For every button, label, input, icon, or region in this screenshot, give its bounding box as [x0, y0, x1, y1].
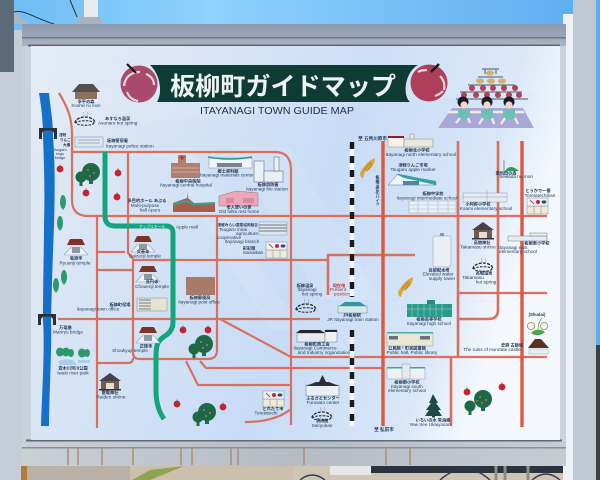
place: town office [77, 298, 167, 312]
place: Koami elementary school: Koami elementary school [460, 206, 512, 211]
right sky strip [595, 0, 600, 345]
place: east elementary school: 板柳東小学校 [524, 240, 550, 246]
place: Takamasu shrine: Takamasu shrine [460, 244, 496, 250]
place: old folks rest home: 老人憩いの家 [226, 204, 252, 210]
place: Chouenji temple: Chouenji temple [135, 284, 169, 289]
place: town office: 板柳町役場 [110, 301, 131, 308]
place: Chouenji temple: 長円寺 [146, 278, 158, 285]
place: central hospital: Itayanagi central hospital [160, 182, 212, 188]
label: Goshogawara direction: 至 五所川原市 [358, 135, 387, 142]
place: commerce and industry organization: Itayanagi Commerce [293, 346, 337, 350]
place: Takamasu shrine [460, 222, 496, 250]
place: Takamasu shrine: 高増神社 [474, 239, 491, 246]
illustration: children carrying apple pyramid [438, 69, 534, 128]
title banner [150, 65, 418, 102]
apples and trees: north-west field [57, 163, 121, 200]
wooden post base [21, 466, 27, 480]
place: Shoukyuji temple: Shoukyuji temple [112, 348, 148, 353]
place: ruins of Hurutate castle: The ruins of Hurutate castle [463, 347, 521, 352]
place: agricultural cooperative: cooperative [217, 235, 242, 240]
place: multi-purpose hall Apuru: Multi-purpose [131, 203, 160, 208]
place: Raiden shrine: Raiden shrine [97, 394, 126, 400]
place: Tsugaru ringo bridge: ringo [56, 152, 64, 156]
place: fire station [246, 157, 288, 192]
place: agricultural cooperative: 津軽みらい農業協同組合 [217, 222, 258, 227]
place: Iwaki river park [56, 348, 90, 376]
apples and trees: central field [180, 326, 213, 358]
place: north elementary school: 板柳北小学校 [404, 146, 430, 154]
icon: corn, south [398, 277, 413, 297]
place: high school: 板柳高等学校 [416, 316, 442, 322]
place: apple market: Tsugaru apple market [390, 167, 436, 172]
place: Seiryukan [312, 407, 333, 428]
place: Ryuenji temple: 竜淵寺 [70, 254, 82, 262]
place: agricultural cooperative: Itayanagi branch [225, 239, 260, 244]
place: Ryuenji temple: Ryuenji temple [59, 260, 91, 266]
place: Raiden shrine: 雷電神社 [102, 389, 119, 396]
place: Tonda bo ichiban shop: とうかで一番 [525, 187, 551, 194]
place: Koami elementary school [460, 190, 512, 211]
place: Manryu bridge: Manryu bridge [53, 330, 83, 334]
place: south elementary school: 板柳南小学校 [394, 378, 420, 386]
place: Sewada no mori [496, 160, 533, 179]
place: Daizenji temple: Daizenji temple [129, 254, 161, 258]
place: commerce and industry organization: and Industry organization [298, 350, 351, 355]
sky background [0, 0, 600, 30]
place: Toretatechi: とれたて市 [263, 405, 284, 412]
place: Asunaro hot spring: あすなろ温泉 [105, 115, 131, 122]
place: fire station: 板柳消防署 [258, 181, 278, 188]
place: Daizenji temple [129, 236, 161, 258]
icon: right apple [410, 64, 448, 102]
place: Saisaikan [243, 242, 287, 258]
left dark utility box [0, 0, 14, 72]
place: east elementary school: Itayanagi east [498, 245, 528, 250]
place: Itayanagi hot spring: hot spring [302, 292, 323, 296]
label: present position: position [334, 292, 350, 296]
place: central hospital: 板柳中央病院 [175, 178, 201, 184]
bottom frame beam [22, 440, 566, 466]
place: Furusato center: Furusato center [307, 400, 340, 405]
place: multi-purpose hall Apuru: hall Apuru [140, 208, 161, 212]
place: Ryuenji temple [59, 239, 91, 266]
ground: pavement behind the sign [0, 460, 600, 480]
place: intermediate school: 板柳中学校 [423, 190, 444, 197]
place: multi-purpose hall Apuru: 多目的ホール あぷる [128, 197, 166, 204]
right background building edge [595, 345, 600, 480]
sign left post [0, 72, 22, 480]
bicycles behind the sign [300, 466, 560, 480]
place: Shoukyuji temple [112, 327, 160, 353]
place: Raiden shrine [97, 373, 126, 400]
place: north elementary school: Itayanagi north elementary school [386, 152, 456, 157]
place: multi-purpose hall Apuru [128, 192, 215, 212]
place: central hospital [160, 155, 212, 188]
place: apple market [388, 162, 436, 185]
place: town office: Itayanagi town office [77, 306, 120, 312]
place: Seiryukan: 清流館 [316, 417, 328, 424]
place: public hall and library [387, 332, 438, 355]
icon: forest house [72, 84, 100, 99]
green road: apple mall [105, 152, 173, 419]
place: police station: 板柳警察署 [107, 137, 128, 144]
place: high school: Itayanagi high school [407, 321, 451, 326]
apples and trees: south-central field [174, 400, 226, 426]
place: Kouhei no mori [72, 84, 100, 108]
place: Tonda bo ichiban shop: Toretatechiban [525, 193, 556, 198]
place: Itayanagi hot spring: Itayanagi [297, 287, 317, 292]
place: Furusato center: ふるさとセンター [306, 394, 340, 402]
place: JR train station: JR板柳駅 [343, 312, 362, 318]
place: old folks rest home: Old folks rest home [219, 209, 260, 214]
place: Asunaro hot spring [75, 112, 138, 126]
place: apple market: 津軽りんご市場 [398, 162, 428, 168]
place: post office [178, 277, 220, 304]
road network [58, 93, 547, 428]
place: agricultural cooperative: Tsugaru mirai [219, 227, 247, 232]
window reflections on the board [31, 46, 560, 330]
place: Tsugaru ringo bridge: 大橋 [63, 142, 71, 147]
label: apple mall on road: アップルモール [139, 224, 165, 229]
place: Toretatechi [255, 391, 284, 416]
place: Chouenji temple [135, 266, 169, 289]
place: materials center [200, 157, 254, 178]
river [39, 93, 55, 426]
place: east elementary school [498, 233, 550, 254]
place: ruins of Hurutate castle [463, 312, 549, 354]
sign right post [563, 0, 596, 480]
place: Asunaro hot spring: Asunaro hot spring [98, 120, 138, 126]
place: agricultural cooperative [217, 222, 287, 244]
place: police station: Itayanagi police station [106, 144, 154, 148]
place: Iwaki river park: 岩木川河川公園 [58, 364, 88, 372]
place: fire station: Itayanagi fire station [246, 186, 288, 192]
place: Kouhei no mori: 幸平の森 [78, 98, 95, 105]
place: agricultural cooperative: agriculture [236, 231, 258, 236]
place: yew tree: いちいの木 常海橋 [416, 416, 451, 424]
place: north elementary school [386, 134, 456, 157]
apples and trees: south-east field [464, 382, 505, 415]
subtitle: ITAYANAGI TOWN GUIDE MAP [200, 106, 354, 117]
left sign shoulder [14, 8, 28, 24]
place: police station [75, 137, 154, 148]
place: Daizenji temple: 大善寺 [137, 248, 149, 255]
place: materials center: Itayanagi materials center [200, 172, 254, 178]
place: commerce and industry organization [293, 330, 351, 355]
place: public hall and library: 公民館・町民図書館 [388, 344, 426, 352]
place: Iwaki river park: Iwaki river park [57, 370, 89, 376]
place: south elementary school: Itayanagi south [391, 384, 423, 389]
title text: 板柳町ガイドマップ [170, 73, 396, 101]
label: present position [330, 282, 350, 296]
railway line [350, 142, 354, 426]
place: old folks rest home [219, 191, 260, 214]
place: yew tree [409, 394, 451, 427]
place: south elementary school [387, 364, 426, 393]
place: Takamasu hot spring: Takamasu [462, 275, 484, 280]
place: Takamasu hot spring: hot spring [476, 280, 497, 284]
place: Tsugaru ringo bridge: bridge [55, 156, 65, 160]
place: elevated water supply tower: 高架配水塔 [429, 266, 450, 274]
place: south elementary school: elementary school [388, 388, 426, 393]
label: present position: Present [330, 287, 347, 292]
place: JR train station: JR Itayanagi train station [327, 317, 379, 322]
place: Manryu bridge: 万竜橋 [59, 324, 72, 331]
place: Saisaikan: 彩彩館 [243, 244, 255, 252]
place: elevated water supply tower [422, 233, 456, 281]
label: present position: 現在地 [333, 282, 346, 289]
map board panel [31, 46, 560, 440]
place: elevated water supply tower: Elevated water [422, 272, 454, 276]
place: public hall and library: Public hall, Public library [387, 350, 438, 355]
riverside bushes [53, 195, 67, 293]
place: Tonda bo ichiban shop [525, 187, 556, 214]
place: Toretatechi: Toretatechi [255, 410, 277, 416]
label: Apple mall: Apple mall [176, 224, 198, 230]
place: ruins of Hurutate castle: (Shudai) [529, 312, 546, 317]
place: intermediate school: Itayanagi intermediate school [397, 196, 457, 200]
place: Manryu bridge [38, 314, 83, 334]
place: Koami elementary school: 小阿弥小学校 [465, 200, 491, 208]
place: Takamasu hot spring [462, 258, 497, 284]
place: Tsugaru ringo bridge: Tsugaru [53, 148, 67, 152]
icon: left apple [120, 64, 158, 102]
place: Saisaikan: Saisaikan [243, 250, 264, 255]
place: Kouhei no mori: Kouhei no mori [72, 103, 100, 108]
place: Seiryukan: Seiryukan [312, 423, 333, 428]
vertical label: activity heights: 板柳活性化ハイツ [375, 174, 380, 207]
place: yew tree: Yew tree Ukaiyosan [409, 422, 451, 427]
place: intermediate school [397, 190, 457, 213]
place: east elementary school: elementary school [499, 249, 537, 254]
place: Itayanagi hot spring [296, 282, 323, 312]
antenna pole on the roof [14, 0, 101, 25]
place: ruins of Hurutate castle: 史跡 古館城 [501, 342, 524, 348]
top frame beam [22, 24, 566, 46]
place: Sewada no mori: 瀬和田の森 [496, 170, 517, 176]
icon: corn, north [360, 158, 375, 178]
place: commerce and industry organization: 板柳町商工会 [304, 340, 330, 348]
place: materials center: 郷土資料館 [218, 168, 238, 174]
place: post office: 板柳郵便局 [190, 294, 210, 301]
place: high school [407, 300, 452, 326]
place: JR train station [327, 302, 379, 322]
place: Tsugaru ringo bridge [39, 128, 71, 160]
place: post office: Itayanagi post office [178, 300, 220, 304]
place: elevated water supply tower: supply tower [429, 276, 456, 281]
place: Sewada no mori: Sewada no mori [499, 174, 533, 179]
place: Shoukyuji temple: 正徳寺 [140, 342, 152, 350]
place: Furusato center [306, 375, 340, 405]
place: Tsugaru ringo bridge: りんご [60, 137, 71, 142]
place: Itayanagi hot spring: 板柳温泉 [297, 282, 314, 289]
place: Takamasu hot spring: 高増温泉 [476, 270, 493, 276]
place: Tsugaru ringo bridge: 津軽 [59, 132, 67, 137]
label: Hirosaki direction: 至 弘前市 [374, 426, 394, 433]
